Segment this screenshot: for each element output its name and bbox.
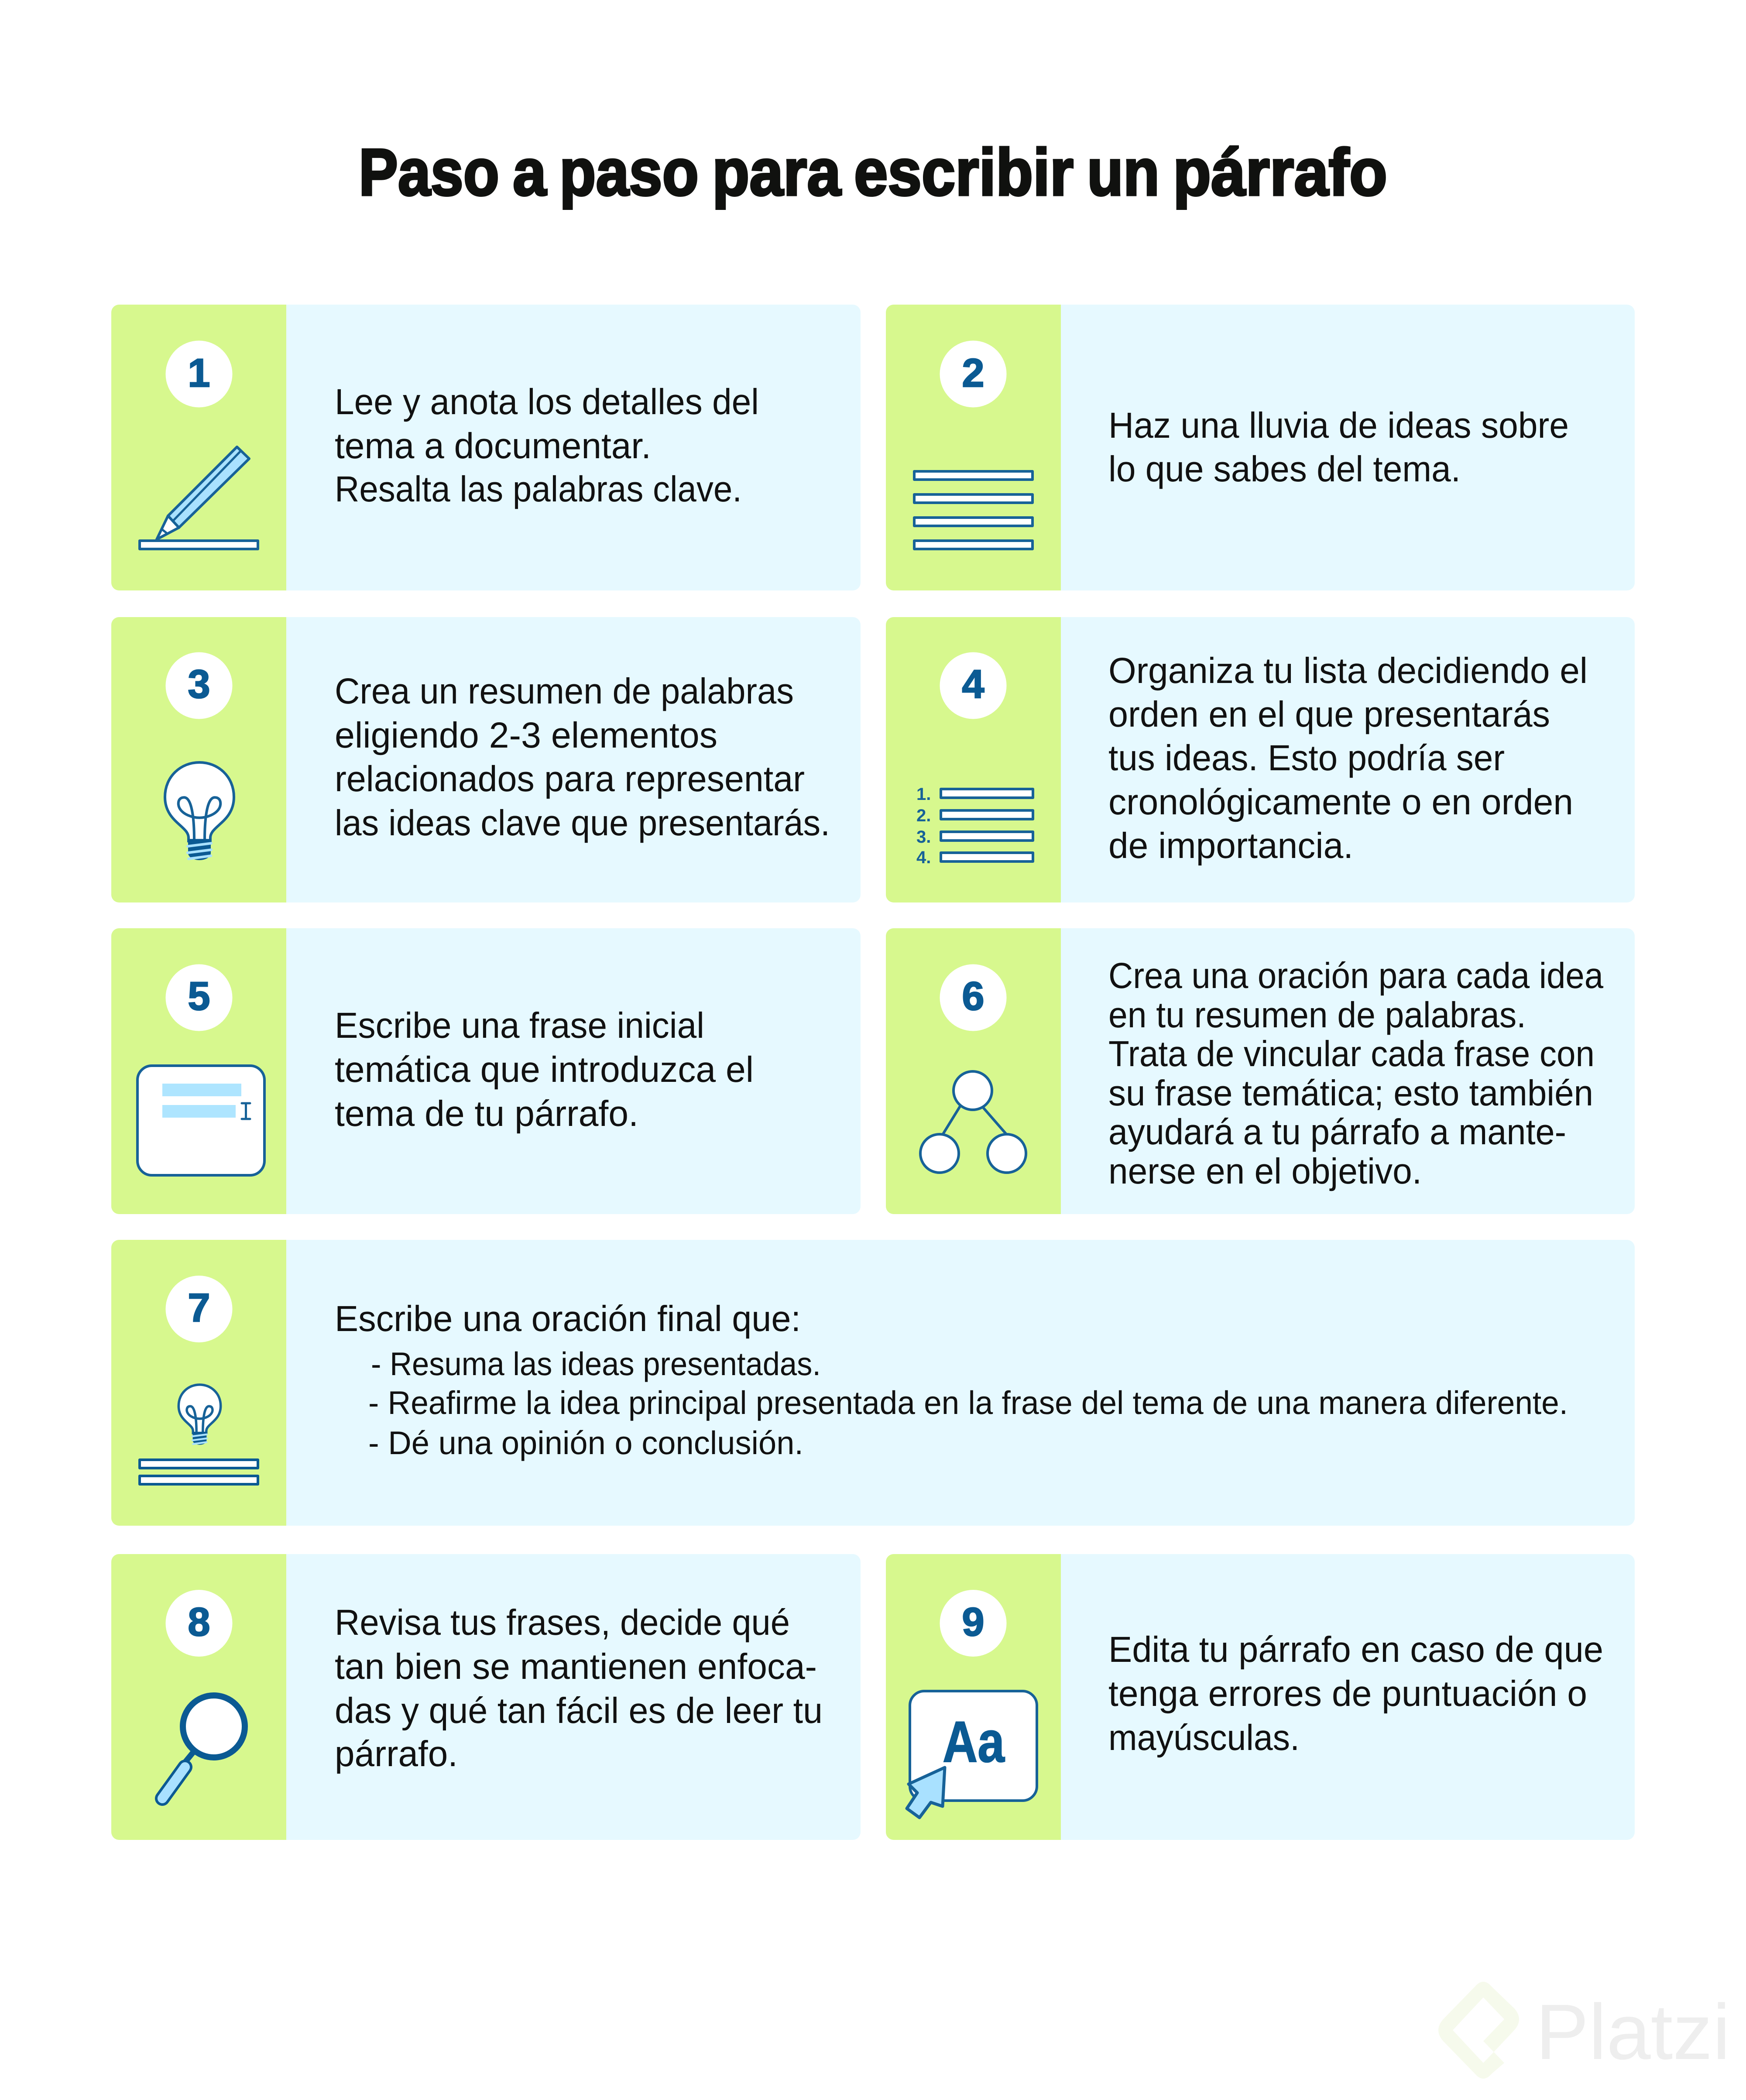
text: step 9: mayúsculas.	[1108, 1717, 1300, 1758]
number badge 4: 4	[962, 662, 984, 707]
title	[359, 135, 1387, 209]
number badge 3: 3	[188, 662, 210, 707]
number badge 7	[166, 1276, 232, 1342]
title: Paso	[359, 135, 499, 209]
text: step 4: Organiza tu lista decidiendo el	[1108, 650, 1588, 691]
text: step 3: Crea un resumen de palabras	[335, 671, 794, 711]
text: step 1	[335, 381, 759, 509]
text: step 3: eligiendo 2-3 elementos	[335, 715, 717, 755]
number badge 3	[166, 652, 232, 719]
number badge 6	[940, 964, 1006, 1031]
number badge 9: 9	[962, 1600, 984, 1644]
text: step 1: Resalta las palabras clave.	[335, 469, 742, 509]
text: step 4	[1108, 650, 1588, 866]
icon: bulb above two lines	[140, 1385, 258, 1484]
panel: step 1	[111, 305, 861, 590]
text: step 7: Escribe una oración final que:	[335, 1298, 801, 1339]
text: step 6	[1108, 955, 1604, 1191]
panel: step 2	[886, 305, 1635, 590]
icon: magnifying glass	[162, 1695, 245, 1798]
text: step 4: cronológicamente o en orden	[1108, 782, 1573, 822]
text: step 2: lo que sabes del tema.	[1108, 449, 1461, 489]
icon: text window with cursor	[137, 1066, 264, 1175]
text: step 9: tenga errores de puntuación o	[1108, 1673, 1587, 1714]
text: step 6: su frase temática; esto también	[1108, 1073, 1593, 1113]
text: step 8: tan bien se mantienen enfoca-	[335, 1646, 817, 1687]
text: step 6: ayudará a tu párrafo a mante-	[1108, 1112, 1566, 1152]
text: step 4: de importancia.	[1108, 825, 1353, 866]
watermark: Platzi logo	[1438, 1982, 1730, 2079]
panel: step 9	[886, 1554, 1635, 1840]
icon: Aa window with arrow cursor: Aa	[943, 1710, 1005, 1774]
icon: numbered list: 1.	[916, 785, 931, 804]
text: step 5: tema de tu párrafo.	[335, 1093, 638, 1134]
number badge 5	[166, 964, 232, 1031]
icon: light bulb	[165, 762, 234, 860]
text: step 9: Edita tu párrafo en caso de que	[1108, 1629, 1603, 1670]
panel: step 7	[111, 1240, 1635, 1526]
title: para	[712, 135, 841, 209]
panel: step 4	[886, 617, 1635, 902]
text: step 4: tus ideas. Esto podría ser	[1108, 738, 1505, 778]
text: step 2: Haz una lluvia de ideas sobre	[1108, 405, 1569, 446]
number badge 8: 8	[188, 1600, 210, 1644]
panel: step 8	[111, 1554, 861, 1840]
icon: numbered list: 4.	[916, 848, 931, 867]
number badge 5: 5	[188, 974, 210, 1019]
number badge 2: 2	[962, 351, 984, 395]
icon: Aa window with arrow cursor	[907, 1691, 1037, 1818]
number badge 9	[940, 1590, 1006, 1657]
text: step 4: orden en el que presentarás	[1108, 694, 1550, 734]
text: step 5: temática que introduzca el	[335, 1049, 754, 1090]
panel: step 3	[111, 617, 861, 902]
text: step 6: nerse en el objetivo.	[1108, 1151, 1422, 1191]
icon: numbered list	[916, 785, 1033, 867]
number badge 1	[166, 340, 232, 408]
text: step 1: Lee y anota los detalles del	[335, 381, 759, 422]
text: step 6: en tu resumen de palabras.	[1108, 995, 1526, 1035]
text: step 2	[1108, 405, 1569, 489]
text: step 3: las ideas clave que presentarás.	[335, 803, 830, 843]
text: step 6: Crea una oración para cada idea	[1108, 955, 1604, 996]
text: step 8: párrafo.	[335, 1733, 458, 1774]
number badge 4	[940, 652, 1006, 719]
text: step 3: relacionados para representar	[335, 758, 805, 799]
text: step 8: Revisa tus frases, decide qué	[335, 1602, 790, 1643]
text: step 6: Trata de vincular cada frase con	[1108, 1033, 1595, 1074]
icon: four text lines	[914, 471, 1033, 549]
icon: numbered list: 2.	[916, 806, 931, 825]
text: step 7: - Resuma las ideas presentadas.	[371, 1345, 821, 1382]
text: step 8: das y qué tan fácil es de leer tu	[335, 1690, 823, 1731]
title: un	[1087, 135, 1159, 209]
text: step 7	[335, 1298, 1568, 1461]
text: step 1: tema a documentar.	[335, 425, 651, 466]
text: step 3	[335, 671, 830, 843]
number badge 6: 6	[962, 974, 984, 1019]
number badge 8	[166, 1590, 232, 1657]
text: step 8	[335, 1602, 823, 1774]
text: step 5: Escribe una frase inicial	[335, 1005, 704, 1046]
title: escribir	[854, 135, 1074, 209]
panel: step 5	[111, 928, 861, 1214]
text: step 7: - Dé una opinión o conclusión.	[368, 1424, 803, 1461]
title: a	[513, 135, 547, 209]
icon: numbered list: 3.	[916, 827, 931, 847]
text: step 9	[1108, 1629, 1603, 1758]
number badge 7: 7	[188, 1286, 210, 1330]
number badge 2	[940, 340, 1006, 408]
watermark: Platzi logo: Platzi	[1536, 1988, 1730, 2076]
number badge 1: 1	[188, 351, 210, 395]
title: párrafo	[1173, 135, 1387, 209]
text: step 5	[335, 1005, 754, 1134]
panel: step 6	[886, 928, 1635, 1214]
icon: tree diagram	[920, 1071, 1026, 1173]
title: paso	[559, 135, 699, 209]
text: step 7: - Reafirme la idea principal presentada en la frase del tema de una manera diferente.	[368, 1384, 1568, 1421]
icon: pencil writing on a line	[140, 447, 258, 549]
